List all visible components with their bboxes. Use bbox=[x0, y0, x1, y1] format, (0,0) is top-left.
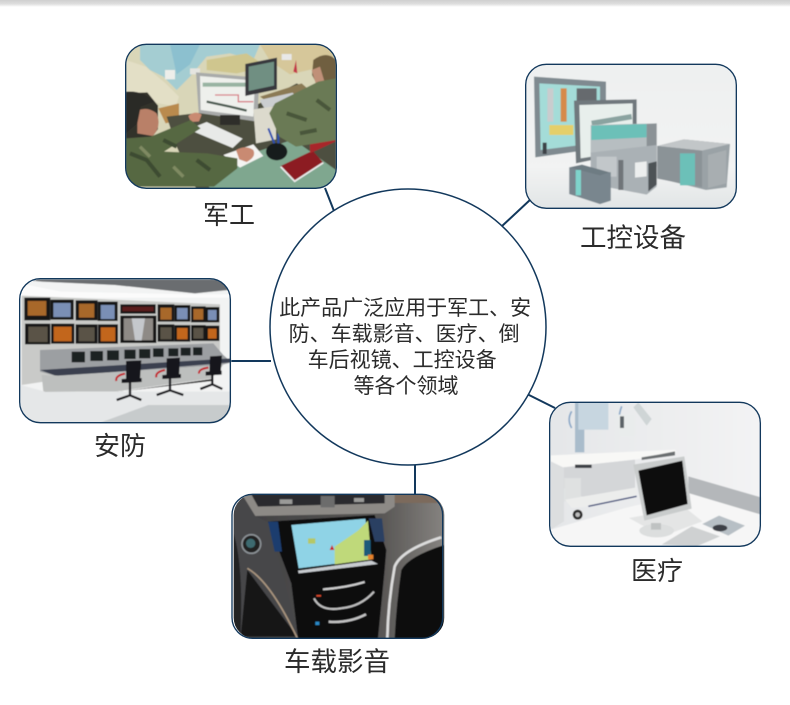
panel: military photo bbox=[120, 40, 343, 193]
circle description text: 防、车载影音、医疗、倒 bbox=[289, 323, 520, 346]
label: industrial control: 工控设备 bbox=[580, 223, 686, 253]
circle description text: 车后视镜、工控设备 bbox=[308, 349, 497, 372]
panel: security monitoring photo bbox=[15, 275, 238, 428]
label: military: 军工 bbox=[203, 200, 255, 230]
label: security: 安防 bbox=[94, 431, 146, 461]
panel: industrial control photo bbox=[520, 60, 743, 213]
panel: car audio-video photo bbox=[228, 490, 451, 643]
connector lines bbox=[230, 188, 555, 494]
circle description text: 等各个领域 bbox=[354, 375, 458, 398]
label: medical: 医疗 bbox=[631, 556, 683, 586]
label: car audio-video: 车载影音 bbox=[284, 647, 390, 677]
center circle bbox=[270, 189, 546, 465]
panel: medical photo bbox=[545, 398, 768, 551]
circle description text: 此产品广泛应用于军工、安 bbox=[279, 297, 531, 320]
top shadow band bbox=[0, 0, 790, 7]
